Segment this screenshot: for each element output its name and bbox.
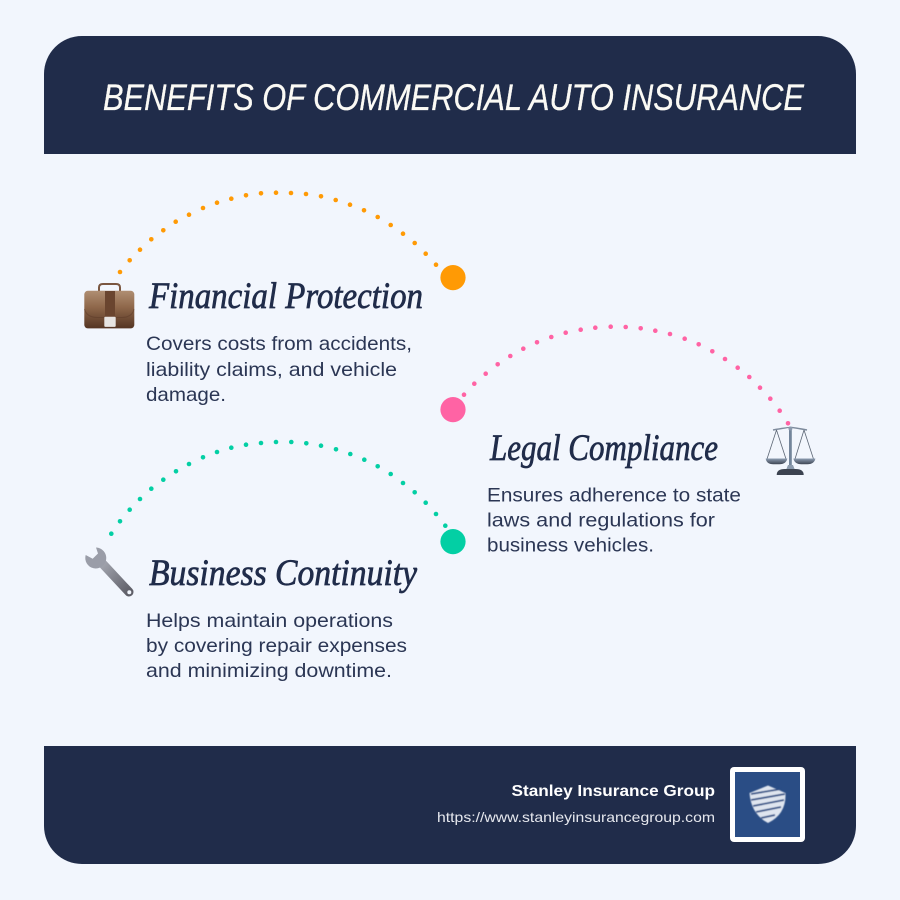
- description: Helps maintain operations: [146, 610, 393, 632]
- panel: legal compliance: [440, 324, 815, 556]
- description: Covers costs from accidents,: [146, 333, 412, 355]
- panel: business continuity: [85, 440, 466, 682]
- description: laws and regulations for: [487, 510, 716, 532]
- description: by covering repair expenses: [146, 635, 407, 657]
- heading: Business Continuity: [149, 553, 418, 594]
- description: business vehicles.: [487, 534, 654, 556]
- description: damage.: [146, 384, 226, 406]
- icon: briefcase: [84, 284, 134, 328]
- header banner: [44, 36, 856, 154]
- description: [146, 333, 412, 406]
- dotted arc: pink: [440, 324, 790, 426]
- heading: Financial Protection: [148, 276, 423, 317]
- logo: [730, 767, 805, 842]
- company name: Stanley Insurance Group: [512, 783, 715, 800]
- icon: shield: [750, 786, 786, 823]
- description: liability claims, and vehicle: [146, 359, 397, 381]
- heading: Legal Compliance: [489, 428, 718, 469]
- panel: financial protection: [84, 190, 466, 406]
- website url: https://www.stanleyinsurancegroup.com: [437, 809, 715, 825]
- description: [487, 484, 741, 556]
- description: Ensures adherence to state: [487, 484, 741, 506]
- icon: wrench: [85, 548, 131, 594]
- icon: balance scales: [766, 426, 815, 475]
- description: and minimizing downtime.: [146, 660, 392, 682]
- dotted arc: green: [109, 440, 466, 554]
- footer banner: [44, 746, 856, 864]
- dotted arc: orange: [118, 190, 466, 290]
- description: [146, 610, 407, 682]
